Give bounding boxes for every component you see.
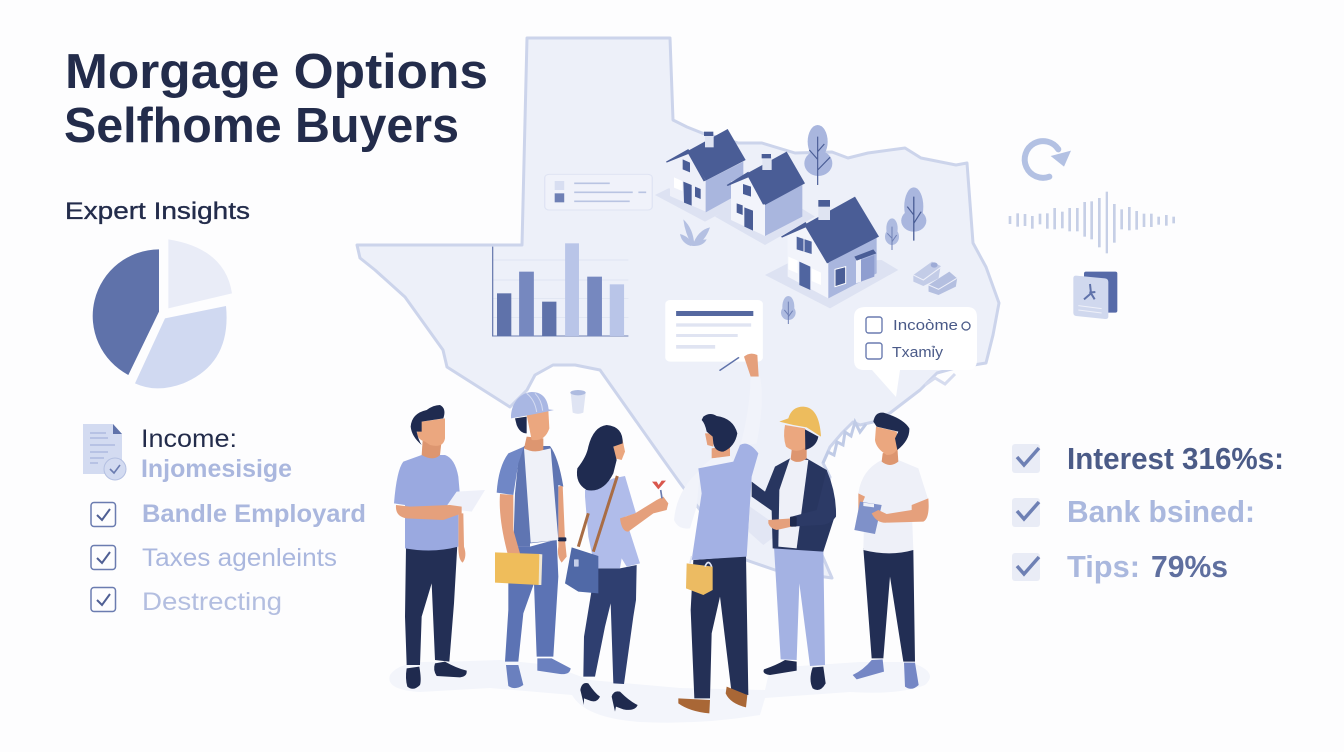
list card — [545, 174, 652, 210]
person 3 woman with bag — [565, 425, 668, 712]
icon: waveform — [1009, 192, 1175, 253]
item: bank: Bank bsined: — [1067, 494, 1255, 529]
icon: refresh — [1025, 141, 1071, 178]
left checklist — [83, 424, 366, 616]
person 5 with yellow hard hat — [748, 407, 836, 690]
title: Selfhome Buyers — [64, 99, 459, 153]
item: destrecting: Destrecting — [142, 588, 282, 616]
income sub-label: Injomesisige — [141, 455, 292, 483]
map contents: chart, cards, stacks — [493, 174, 957, 371]
pen — [719, 357, 739, 371]
item: destrecting — [91, 588, 282, 616]
tree 4 — [781, 296, 796, 324]
money stacks — [913, 262, 957, 295]
item: tips: 79%s — [1151, 549, 1228, 584]
item: bandle employard: Bandle Employard — [142, 500, 366, 528]
callout: checklist: Incoòme — [893, 317, 958, 334]
icon: document pair — [1073, 272, 1117, 319]
title: Morgage Options — [65, 45, 488, 99]
person 2 with hard hat and folder — [495, 392, 571, 688]
income label: Income: — [141, 425, 237, 453]
icon: document with check — [83, 424, 126, 480]
ground shadow — [389, 660, 930, 723]
people group B — [674, 354, 929, 713]
cup — [570, 390, 586, 414]
house 3 — [765, 197, 898, 308]
title — [64, 45, 488, 153]
heading: expert insights: Expert Insights — [65, 198, 250, 225]
item: tips — [1012, 549, 1228, 584]
houses and trees — [655, 125, 899, 324]
tree 2 — [901, 187, 926, 241]
right checklist — [1012, 441, 1284, 584]
callout: checklist: Txamỉy — [892, 344, 944, 361]
item: interest: Interest 316%s: — [1067, 441, 1284, 476]
tree 1 — [804, 125, 832, 185]
tree 3 — [885, 218, 899, 250]
callout: checklist — [854, 307, 977, 397]
people group A — [394, 390, 668, 712]
person 4 writing on card — [674, 354, 762, 713]
person 6 with tablet — [853, 413, 929, 689]
item: tips: Tips: — [1067, 549, 1140, 584]
plant — [680, 219, 710, 246]
person 1 with tablet — [394, 405, 485, 689]
note card — [665, 300, 763, 362]
pie chart — [93, 239, 232, 388]
house 2 — [715, 152, 815, 245]
item: taxes agenleints: Taxes agenleints — [142, 544, 337, 572]
map of Texas — [357, 38, 999, 578]
bar chart — [493, 243, 628, 336]
house 1 — [655, 129, 746, 222]
